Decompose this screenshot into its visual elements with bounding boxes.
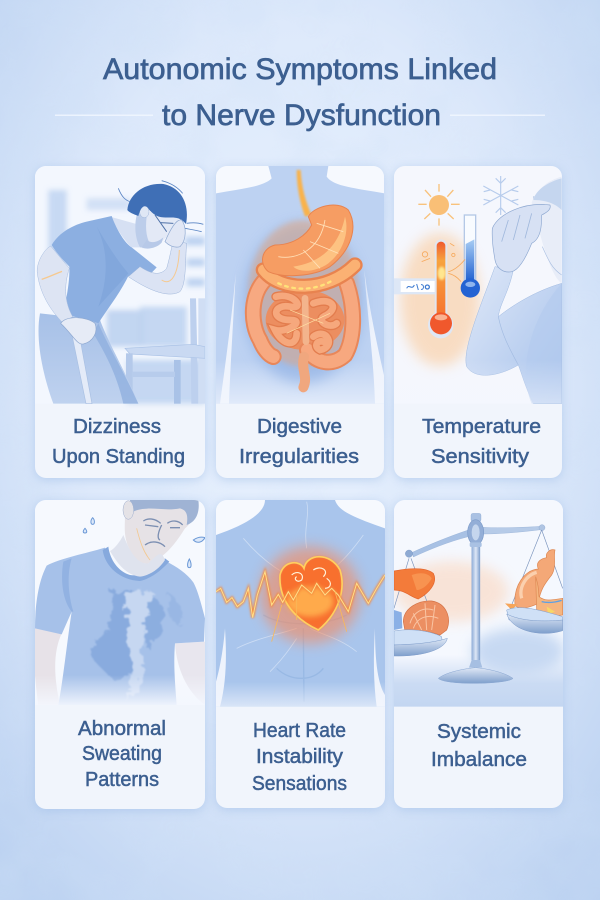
caption: dizziness upon standing: [52, 415, 185, 468]
right pan with organs: [505, 550, 563, 633]
caption: heart rate instability sensations: Heart Rate: [253, 720, 346, 742]
illustration: balance scale weighing organs: [394, 500, 565, 707]
caption: heart rate instability sensations: [252, 720, 347, 795]
panel: heart rate instability sensations: [216, 500, 385, 810]
sweat patches: [89, 590, 182, 679]
caption: abnormal sweating patterns: Patterns: [85, 769, 159, 791]
caption: systemic imbalance: Imbalance: [431, 748, 527, 771]
panel: systemic imbalance: [394, 500, 565, 810]
icon: hot thermometer: [428, 239, 453, 338]
caption: abnormal sweating patterns: [78, 718, 166, 791]
person: [466, 267, 562, 404]
illustration: torso with glowing heart and ECG trace: [216, 500, 385, 707]
caption: digestive irregularities: Digestive: [257, 415, 342, 438]
caption: temperature sensitivity: Temperature: [422, 415, 541, 438]
panel: digestive irregularities: [216, 166, 384, 480]
panel: temperature sensitivity: [394, 166, 562, 480]
illustration: torso with glowing digestive tract: [216, 166, 384, 404]
caption: abnormal sweating patterns: Sweating: [82, 743, 162, 765]
caption: heart rate instability sensations: Instability: [256, 746, 343, 768]
caption: heart rate instability sensations: Sensations: [252, 773, 347, 795]
caption: digestive irregularities: [239, 415, 359, 468]
scale stand: [405, 513, 545, 683]
title: [55, 53, 545, 132]
title: to Nerve Dysfunction: [162, 99, 441, 132]
caption: systemic imbalance: Systemic: [437, 720, 521, 743]
panel: dizziness upon standing: [35, 166, 205, 480]
illustration: dizzy man holding his head: [35, 166, 205, 404]
caption: temperature sensitivity: Sensitivity: [431, 445, 530, 468]
stomach: [263, 205, 353, 276]
icon: cold thermometer: [461, 215, 480, 298]
title: Autonomic Symptoms Linked: [103, 53, 497, 86]
caption: temperature sensitivity: [422, 415, 541, 468]
caption: systemic imbalance: [431, 720, 527, 771]
caption: dizziness upon standing: Dizziness: [73, 415, 161, 438]
icon: tag: [394, 278, 436, 294]
icon: snowflake: [483, 176, 518, 215]
icon: sun: [418, 184, 460, 226]
caption: digestive irregularities: Irregularities: [239, 445, 359, 468]
caption: dizziness upon standing: Upon Standing: [52, 445, 185, 468]
caption: abnormal sweating patterns: Abnormal: [78, 718, 166, 740]
colon: [253, 265, 355, 387]
panel: abnormal sweating patterns: [34, 500, 205, 811]
left pan with organs: [394, 530, 563, 656]
illustration: thermometers, sun, snowflake and person touching forehead: [394, 166, 562, 404]
illustration: man with sweat patches on shirt: [34, 500, 205, 705]
